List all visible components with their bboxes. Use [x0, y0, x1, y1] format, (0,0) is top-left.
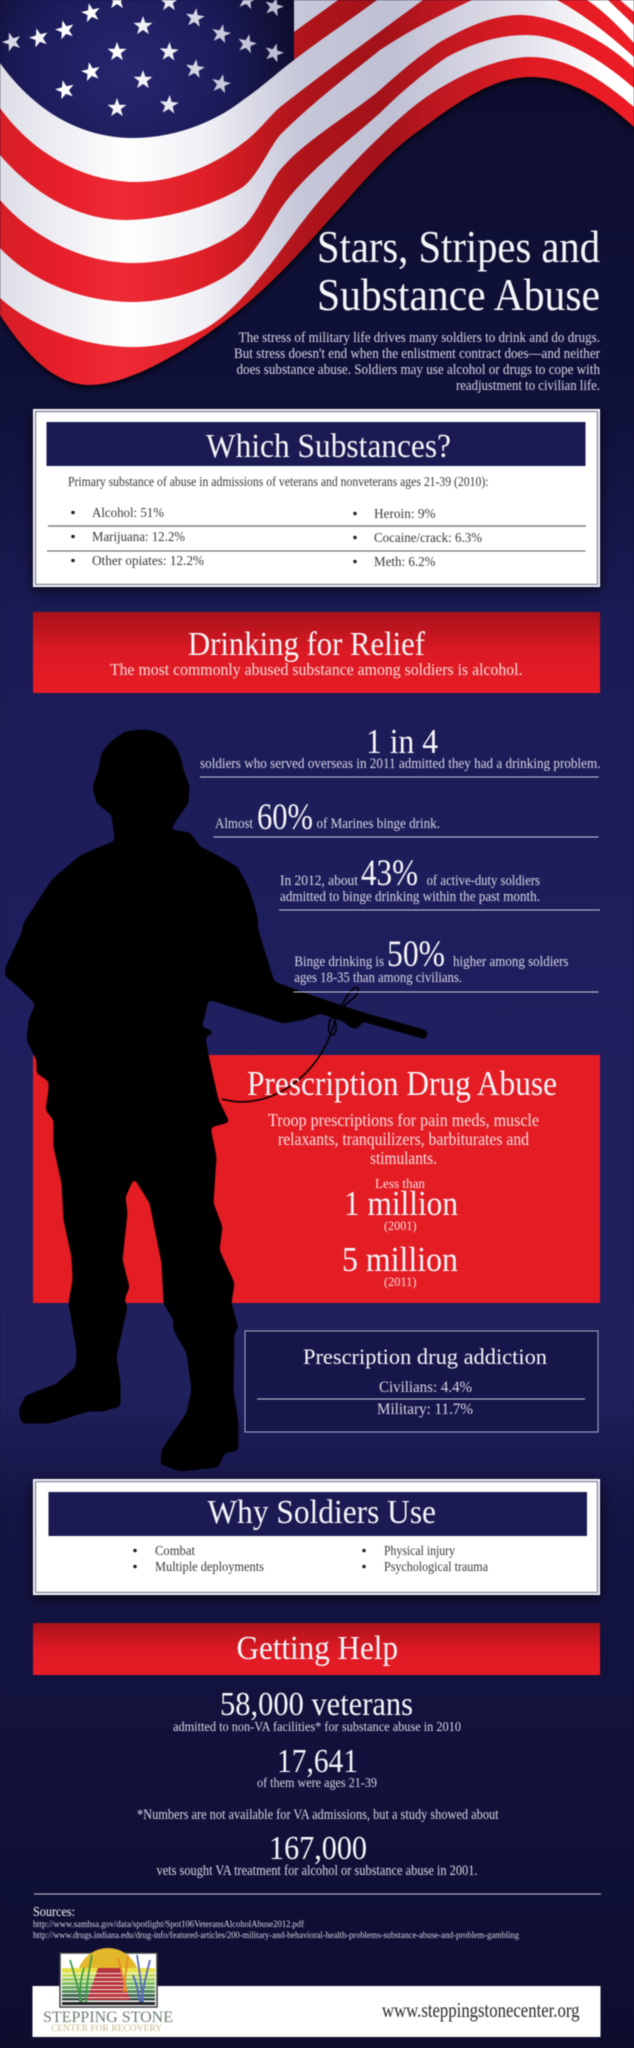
stat: 167,000 [156, 1830, 478, 1879]
stat: 167,000: 167,000 [269, 1830, 367, 1867]
intro text: readjustment to civilian life. [456, 378, 600, 394]
sources: http://www.samhsa.gov/data/spotlight/Spot106VeteransAlcoholAbuse2012.pdf [33, 1919, 305, 1930]
panel: prescription drug addiction: Prescription drug addiction [303, 1344, 547, 1369]
stat: 60 percent: of Marines binge drink. [316, 816, 440, 832]
reasons list: Psychological trauma [384, 1560, 489, 1575]
heading: which substances: Which Substances? [206, 428, 451, 465]
stat: 43 percent: 43% [361, 853, 418, 894]
substances list: Alcohol: 51% [92, 506, 164, 521]
banner: drinking for relief: The most commonly abused substance among soldiers is alcohol. [110, 660, 522, 679]
reasons list [133, 1544, 489, 1575]
stat: 1 million 2001 [344, 1177, 458, 1233]
flag [0, 0, 634, 388]
stat: 1 in 4 [200, 722, 600, 777]
substances list: Marijuana: 12.2% [92, 530, 185, 545]
stat: 17,641 [257, 1743, 377, 1791]
stat: 58,000 veterans: admitted to non-VA facilities* for substance abuse in 2010 [173, 1720, 461, 1735]
substances list: Meth: 6.2% [374, 555, 436, 570]
stars [0, 0, 286, 116]
stat: 1 in 4: soldiers who served overseas in 2011 admitted they had a drinking problem. [200, 756, 600, 772]
prescription description [268, 1110, 539, 1168]
intro text: does substance abuse. Soldiers may use alcohol or drugs to cope with [236, 362, 601, 378]
substances list [71, 506, 482, 570]
stat: 60 percent [214, 797, 598, 838]
prescription description: Troop prescriptions for pain meds, muscle [268, 1110, 539, 1130]
banner: drinking for relief [33, 612, 600, 693]
stat: 5 million 2011: 5 million [342, 1240, 458, 1279]
stat: 43 percent: admitted to binge drinking within the past month. [280, 889, 540, 905]
stat: 60 percent: Almost [215, 816, 253, 832]
reasons list: Combat [155, 1544, 195, 1559]
heading: prescription drug abuse: Prescription Drug Abuse [247, 1064, 557, 1103]
panel: why soldiers use [33, 1479, 600, 1599]
substances intro: Primary substance of abuse in admissions of veterans and nonveterans ages 21-39 (2010): [68, 474, 488, 489]
panel: prescription drug abuse background [33, 1055, 600, 1303]
stat: 1 million 2001: (2001) [384, 1219, 416, 1233]
stat: 58,000 veterans: 58,000 veterans [220, 1686, 413, 1723]
stat: 1 million 2001: Less than [375, 1177, 425, 1192]
sources [33, 1905, 519, 1941]
sources: Sources: [33, 1905, 75, 1920]
banner: getting help [33, 1623, 600, 1675]
banner: drinking for relief: Drinking for Relief [188, 626, 426, 663]
title: Stars, Stripes and [317, 222, 600, 272]
panel: prescription drug addiction: Military: 11.7% [377, 1401, 473, 1418]
stat: 17,641: 17,641 [277, 1743, 358, 1780]
stat: 58,000 veterans [173, 1686, 461, 1735]
icon: stepping stone logo: STEPPING STONE [43, 2009, 173, 2026]
stat: 50 percent: higher among soldiers [453, 954, 569, 970]
stat: 50 percent: Binge drinking is [294, 954, 384, 970]
footnote: *Numbers are not available for VA admissions, but a study showed about [137, 1807, 499, 1823]
website url: www.steppingstonecenter.org [382, 1998, 580, 2022]
stat: 43 percent: In 2012, about [280, 873, 358, 889]
stat: 5 million 2011: (2011) [384, 1275, 416, 1289]
sources: http://www.drugs.indiana.edu/drug-info/featured-articles/200-military-and-behavioral-health-problems-substance-abuse-and-problem-gambling [33, 1930, 519, 1941]
panel: prescription drug addiction [245, 1331, 598, 1432]
prescription description: relaxants, tranquilizers, barbiturates and [278, 1129, 529, 1149]
intro text: The stress of military life drives many soldiers to drink and do drugs. [239, 330, 600, 346]
heading: which substances [46, 422, 586, 466]
flag canton [0, 0, 294, 138]
panel: prescription drug addiction: Civilians: 4.4% [379, 1379, 472, 1396]
stat: 60 percent: 60% [257, 797, 313, 838]
prescription text [247, 1064, 557, 1289]
stat: 50 percent [294, 934, 598, 992]
stat: 1 in 4: 1 in 4 [366, 722, 438, 761]
banner: getting help: Getting Help [236, 1630, 398, 1667]
substances list: Heroin: 9% [374, 507, 436, 522]
reasons list: Multiple deployments [155, 1560, 264, 1575]
stat: 43 percent: of active-duty soldiers [427, 873, 540, 889]
icon: stepping stone logo [43, 1948, 173, 2034]
prescription description: stimulants. [370, 1148, 437, 1168]
intro text: But stress doesn't end when the enlistment contract does—and neither [234, 346, 600, 362]
heading: why soldiers use [48, 1492, 587, 1536]
title [317, 222, 600, 320]
footer [32, 1948, 600, 2037]
heading: why soldiers use: Why Soldiers Use [208, 1494, 436, 1531]
stat: 43 percent [279, 853, 600, 910]
icon: stepping stone logo: CENTER FOR RECOVERY [51, 2024, 162, 2034]
stat: 167,000: vets sought VA treatment for alcohol or substance abuse in 2001. [156, 1863, 478, 1879]
stat: 50 percent: ages 18-35 than among civilians. [294, 970, 462, 986]
stat: 17,641: of them were ages 21-39 [257, 1776, 377, 1791]
substances list: Cocaine/crack: 6.3% [374, 531, 482, 546]
substances list: Other opiates: 12.2% [92, 554, 204, 569]
icon: soldier silhouette [5, 730, 427, 1471]
intro text [234, 330, 601, 394]
panel: which substances [33, 409, 600, 591]
stat: 50 percent: 50% [387, 934, 445, 975]
reasons list: Physical injury [384, 1544, 455, 1559]
title: Substance Abuse [317, 270, 600, 320]
stat: 1 million 2001: 1 million [344, 1184, 458, 1223]
